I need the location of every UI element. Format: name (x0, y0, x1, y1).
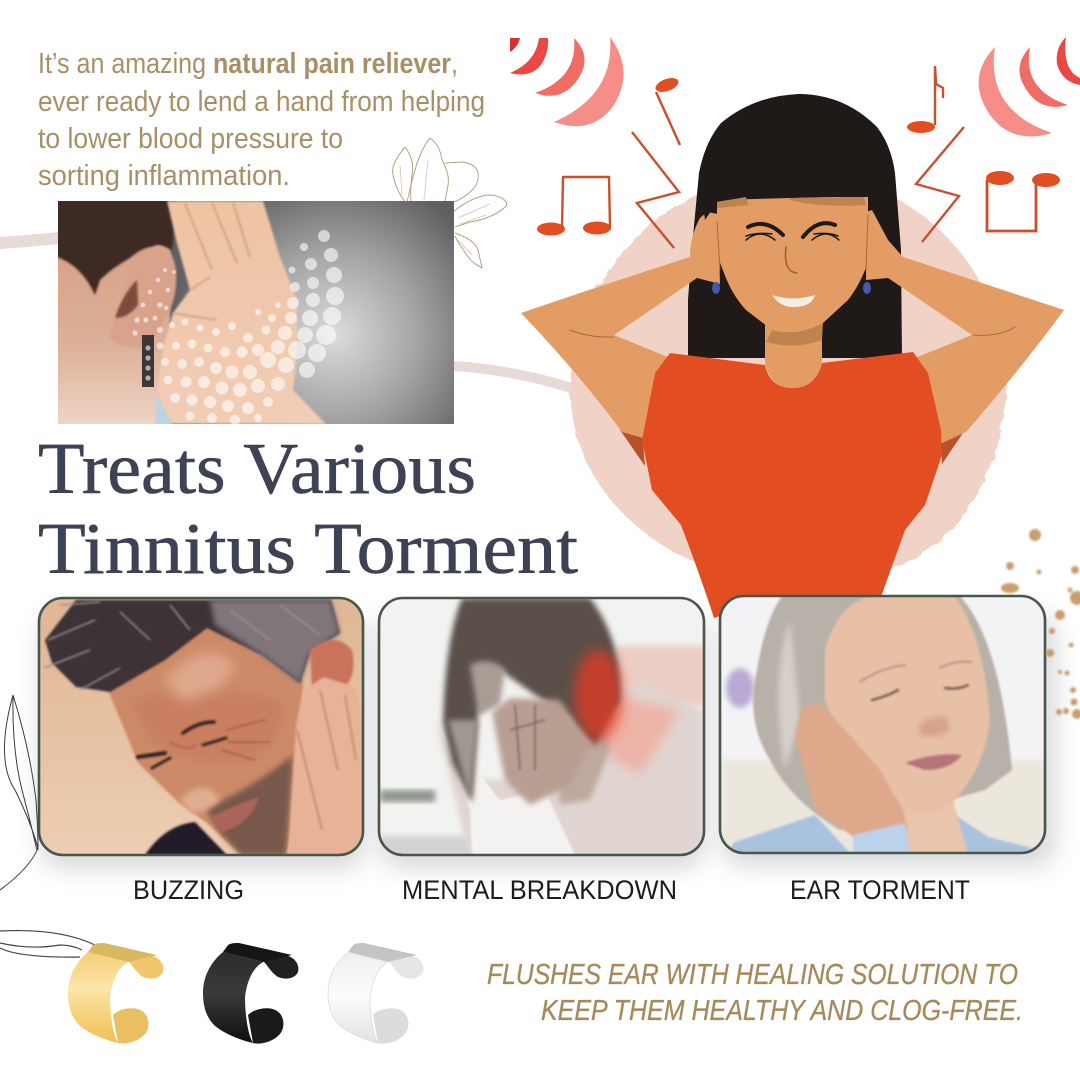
ear cuff: silver (328, 943, 423, 1044)
title (38, 428, 578, 589)
illustration: woman covering ears (521, 94, 1064, 618)
shirt (436, 682, 704, 860)
leaf line art (0, 695, 38, 890)
intro paragraph (38, 48, 485, 192)
neck (556, 724, 612, 807)
ear (110, 245, 176, 347)
floral line art (392, 138, 507, 268)
caption: mental breakdown: MENTAL BREAKDOWN (402, 875, 677, 905)
sound waves: left (510, 37, 624, 126)
zigzag: right (916, 127, 964, 242)
shirt (642, 352, 942, 618)
photo card: mental breakdown (379, 598, 706, 860)
background brush strokes (0, 238, 590, 394)
bangs (699, 94, 890, 220)
caption: ear torment: EAR TORMENT (790, 875, 970, 905)
pink watercolor blob (570, 172, 1006, 572)
hair spikes (44, 602, 320, 690)
caption: buzzing: BUZZING (133, 875, 244, 905)
mouth (772, 295, 815, 307)
double note: left (537, 177, 611, 236)
tagline (487, 959, 1023, 1027)
armpits (620, 430, 965, 466)
ear cuff: gold (68, 943, 163, 1044)
title: Tinnitus Torment (38, 508, 578, 589)
ear cuff: black (203, 943, 298, 1044)
neck (903, 801, 968, 852)
ear (310, 640, 354, 690)
skin of head and neck (58, 245, 172, 424)
zigzag: left (632, 132, 679, 248)
hair (45, 600, 340, 692)
soft shadow under photo cards (40, 612, 1056, 869)
sound waves: right (979, 37, 1080, 136)
forehead highlight (165, 653, 235, 700)
intro paragraph: ever ready to lend a hand from helping (38, 86, 485, 118)
wires (0, 931, 95, 957)
beard (205, 755, 293, 855)
neck (765, 325, 822, 388)
intro paragraph: to lower blood pressure to (38, 123, 343, 155)
double note: right (986, 171, 1060, 231)
dark gap (142, 335, 154, 387)
sleeve (853, 823, 910, 853)
hand and elbow creases (570, 215, 1015, 337)
photo card: ear torment (720, 596, 1045, 855)
intro paragraph: sorting inflammation. (38, 160, 290, 192)
face (825, 596, 990, 814)
neck shadow (766, 323, 823, 346)
hand (795, 703, 908, 838)
left arm (521, 212, 720, 440)
shirt (145, 822, 227, 855)
earrings (712, 282, 871, 294)
eyebrows (748, 223, 835, 237)
photo: hand cupping ear (50, 195, 454, 430)
forehead shadow (717, 197, 866, 208)
forehead (470, 661, 505, 715)
hair (443, 598, 620, 803)
squinting eyes (746, 233, 839, 240)
facial features (570, 215, 1015, 337)
face (717, 196, 868, 335)
sound dots (132, 230, 344, 425)
hands (492, 698, 590, 805)
red pain glow (574, 649, 622, 741)
hair (753, 596, 1012, 830)
hair (688, 94, 902, 358)
note: top right (907, 66, 943, 133)
wall (616, 646, 706, 706)
sweater (730, 814, 1034, 852)
photo card: buzzing (39, 598, 364, 855)
flowers (726, 668, 754, 708)
hand (288, 677, 364, 855)
eyes, brows, mouth (138, 720, 270, 768)
gold splatter (1001, 529, 1080, 719)
right arm (866, 210, 1064, 445)
cupped hand (157, 201, 326, 424)
eyes, nose, lips (860, 662, 972, 700)
intro paragraph: It’s an amazing natural pain reliever, (38, 48, 458, 80)
note: top left (654, 75, 680, 145)
face (108, 618, 303, 855)
hair (58, 201, 178, 296)
nose (785, 247, 797, 273)
title: Treats Various (38, 428, 476, 509)
music notes and zigzags (537, 66, 1060, 248)
